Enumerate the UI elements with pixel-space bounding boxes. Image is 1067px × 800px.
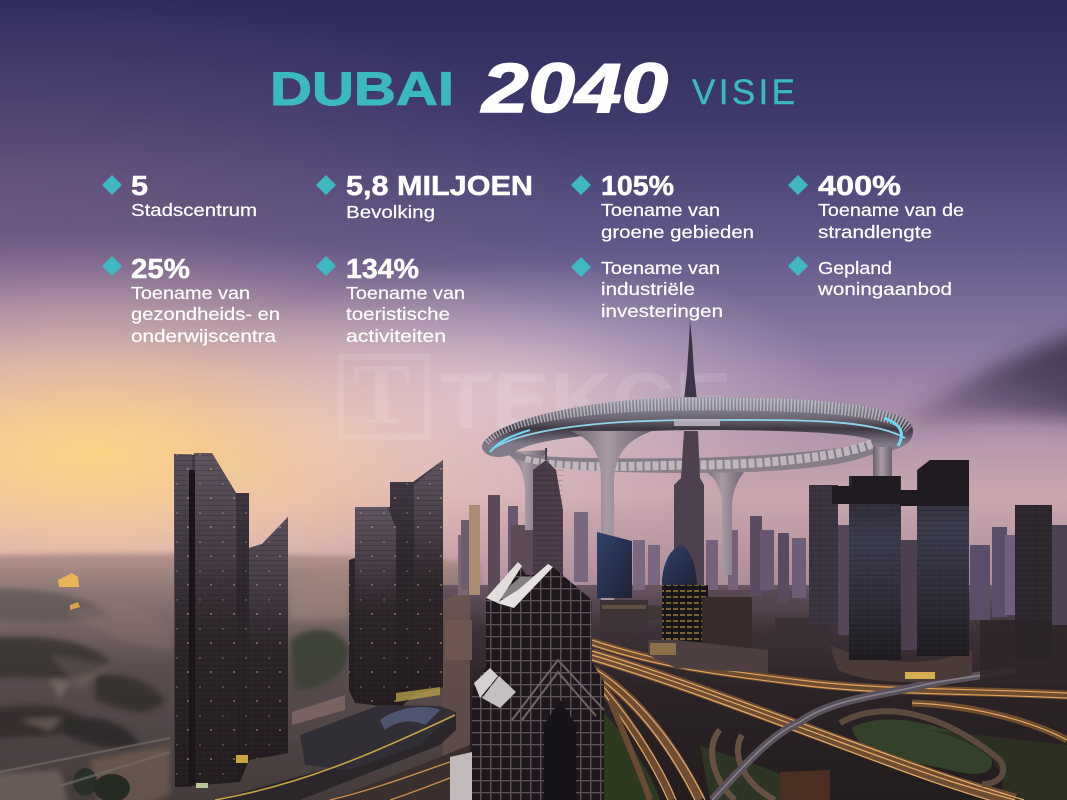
right towers xyxy=(809,460,1052,660)
stat: tourism: toeristische xyxy=(346,304,450,324)
stat: tourism: 134% xyxy=(346,253,419,284)
stat: population xyxy=(316,170,533,222)
title: DUBAI xyxy=(270,62,454,115)
burj khalifa body xyxy=(674,431,704,590)
stat: city centres xyxy=(102,170,257,220)
mid skyline tower xyxy=(533,448,563,585)
stat: beach length: 400% xyxy=(818,170,901,201)
middle twin tower xyxy=(349,460,443,708)
road greens xyxy=(852,720,992,774)
burj khalifa spire xyxy=(684,320,697,400)
ring top deck xyxy=(674,419,720,426)
stat: health and education: Toename van xyxy=(131,283,250,303)
stat: city centres: 5 xyxy=(131,170,148,201)
stat: industrial investment: industriële xyxy=(601,279,695,299)
title xyxy=(270,49,795,127)
stat: population: 5,8 MILJOEN xyxy=(346,170,533,201)
foreground tower xyxy=(472,562,604,800)
hazy skyline xyxy=(458,495,1067,650)
stat: green areas xyxy=(571,170,754,242)
stat: tourism: Toename van xyxy=(346,283,465,303)
stat: green areas: 105% xyxy=(601,170,674,201)
title: VISIE xyxy=(692,73,795,112)
title: 2040 xyxy=(480,49,668,127)
ring support pillars front xyxy=(570,431,892,600)
stat: health and education: onderwijscentra xyxy=(131,326,276,346)
stat: green areas: Toename van xyxy=(601,200,720,220)
watermark xyxy=(338,346,732,445)
stat: city centres: Stadscentrum xyxy=(131,200,257,220)
stat: tourism: activiteiten xyxy=(346,326,446,346)
city ground left xyxy=(0,554,480,800)
stat: industrial investment: investeringen xyxy=(601,301,723,321)
stat: health and education: gezondheids- en xyxy=(131,304,280,324)
stat: beach length: Toename van de xyxy=(818,200,964,220)
watermark: T xyxy=(353,346,410,442)
stat: beach length xyxy=(788,170,964,242)
ring structure xyxy=(482,397,913,473)
stat: beach length: strandlengte xyxy=(818,222,932,242)
stat: industrial investment: Toename van xyxy=(601,258,720,278)
watermark: TEKCE xyxy=(440,356,732,445)
stat: industrial investment xyxy=(571,257,723,321)
ring support pillars back xyxy=(505,450,746,575)
stat: housing supply xyxy=(788,256,952,299)
stat: health and education: 25% xyxy=(131,253,190,284)
stat: housing supply: Gepland xyxy=(818,258,892,278)
stat: housing supply: woningaanbod xyxy=(817,279,952,299)
stat: population: Bevolking xyxy=(346,202,435,222)
stat: health and education xyxy=(102,253,280,346)
city ground right with roads xyxy=(443,585,1067,800)
low plaza left of centre xyxy=(215,620,472,800)
left twin tower xyxy=(174,453,288,788)
highways xyxy=(592,640,1067,800)
stat: green areas: groene gebieden xyxy=(601,222,754,242)
stat: tourism xyxy=(316,253,465,346)
low buildings centre xyxy=(600,585,830,673)
